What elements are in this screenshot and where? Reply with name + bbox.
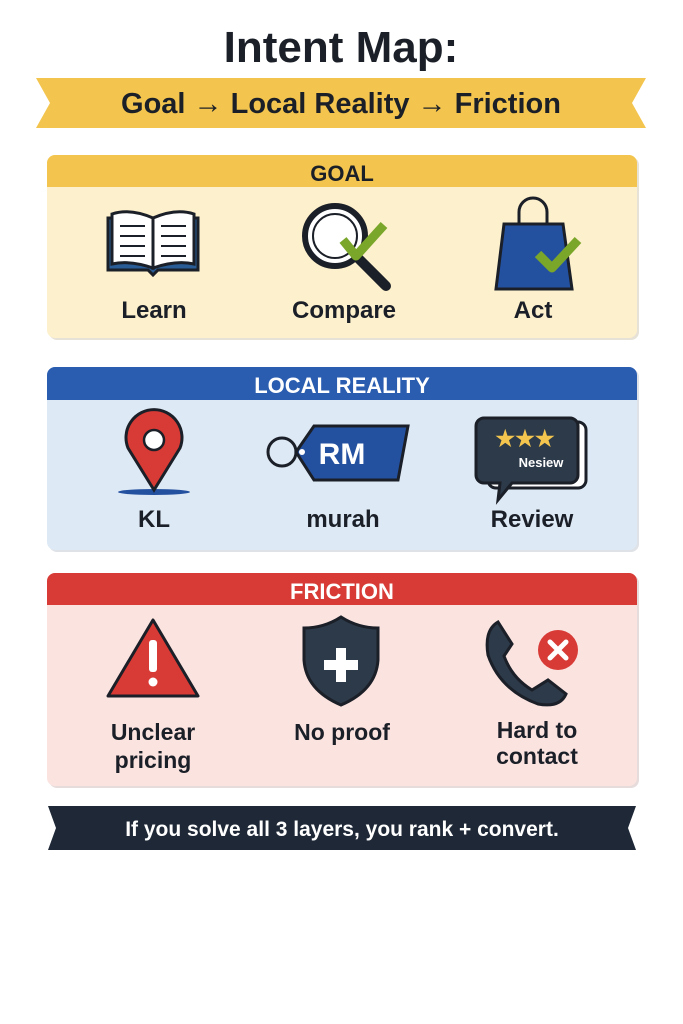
label: no proof: No proof bbox=[294, 719, 390, 745]
label: review: Review bbox=[491, 506, 574, 533]
icon: warning triangle bbox=[108, 620, 198, 696]
icon: review bubble bbox=[476, 418, 586, 500]
icon: RM price tag: RM bbox=[319, 438, 365, 471]
ribbon: subtitle bbox=[36, 78, 646, 128]
panel: local reality: LOCAL REALITY bbox=[254, 373, 430, 398]
panel: friction bbox=[47, 573, 639, 788]
icon: book bbox=[108, 212, 198, 275]
title: Intent Map: bbox=[224, 23, 458, 72]
panel: goal: GOAL bbox=[310, 161, 374, 186]
label: act: Act bbox=[514, 297, 552, 324]
icon: magnifier with check bbox=[305, 206, 386, 286]
label: unclear pricing: pricing bbox=[115, 747, 191, 773]
ribbon: subtitle: Goal → Local Reality → Friction bbox=[121, 88, 561, 120]
label: murah: murah bbox=[306, 506, 380, 533]
icon: review bubble: ★★★ bbox=[495, 426, 555, 451]
label: compare: Compare bbox=[292, 297, 396, 324]
label: hard to contact: Hard to bbox=[497, 717, 577, 743]
panel: goal bbox=[47, 155, 639, 340]
label: unclear pricing: Unclear bbox=[111, 719, 195, 745]
panel: friction: FRICTION bbox=[290, 579, 394, 604]
label: learn: Learn bbox=[121, 297, 187, 324]
label: KL: KL bbox=[138, 506, 170, 533]
icon: phone with X bbox=[487, 622, 578, 705]
label: hard to contact: contact bbox=[496, 743, 578, 769]
icon: RM price tag bbox=[268, 426, 408, 480]
icon: shield bbox=[304, 617, 378, 705]
banner: conclusion: If you solve all 3 layers, you rank + convert. bbox=[125, 818, 559, 841]
panel: local reality bbox=[47, 367, 639, 552]
icon: review bubble: Nesiew bbox=[519, 455, 564, 470]
banner: conclusion bbox=[48, 806, 636, 850]
icon: shopping bag bbox=[496, 198, 578, 289]
icon: map pin bbox=[118, 410, 190, 495]
